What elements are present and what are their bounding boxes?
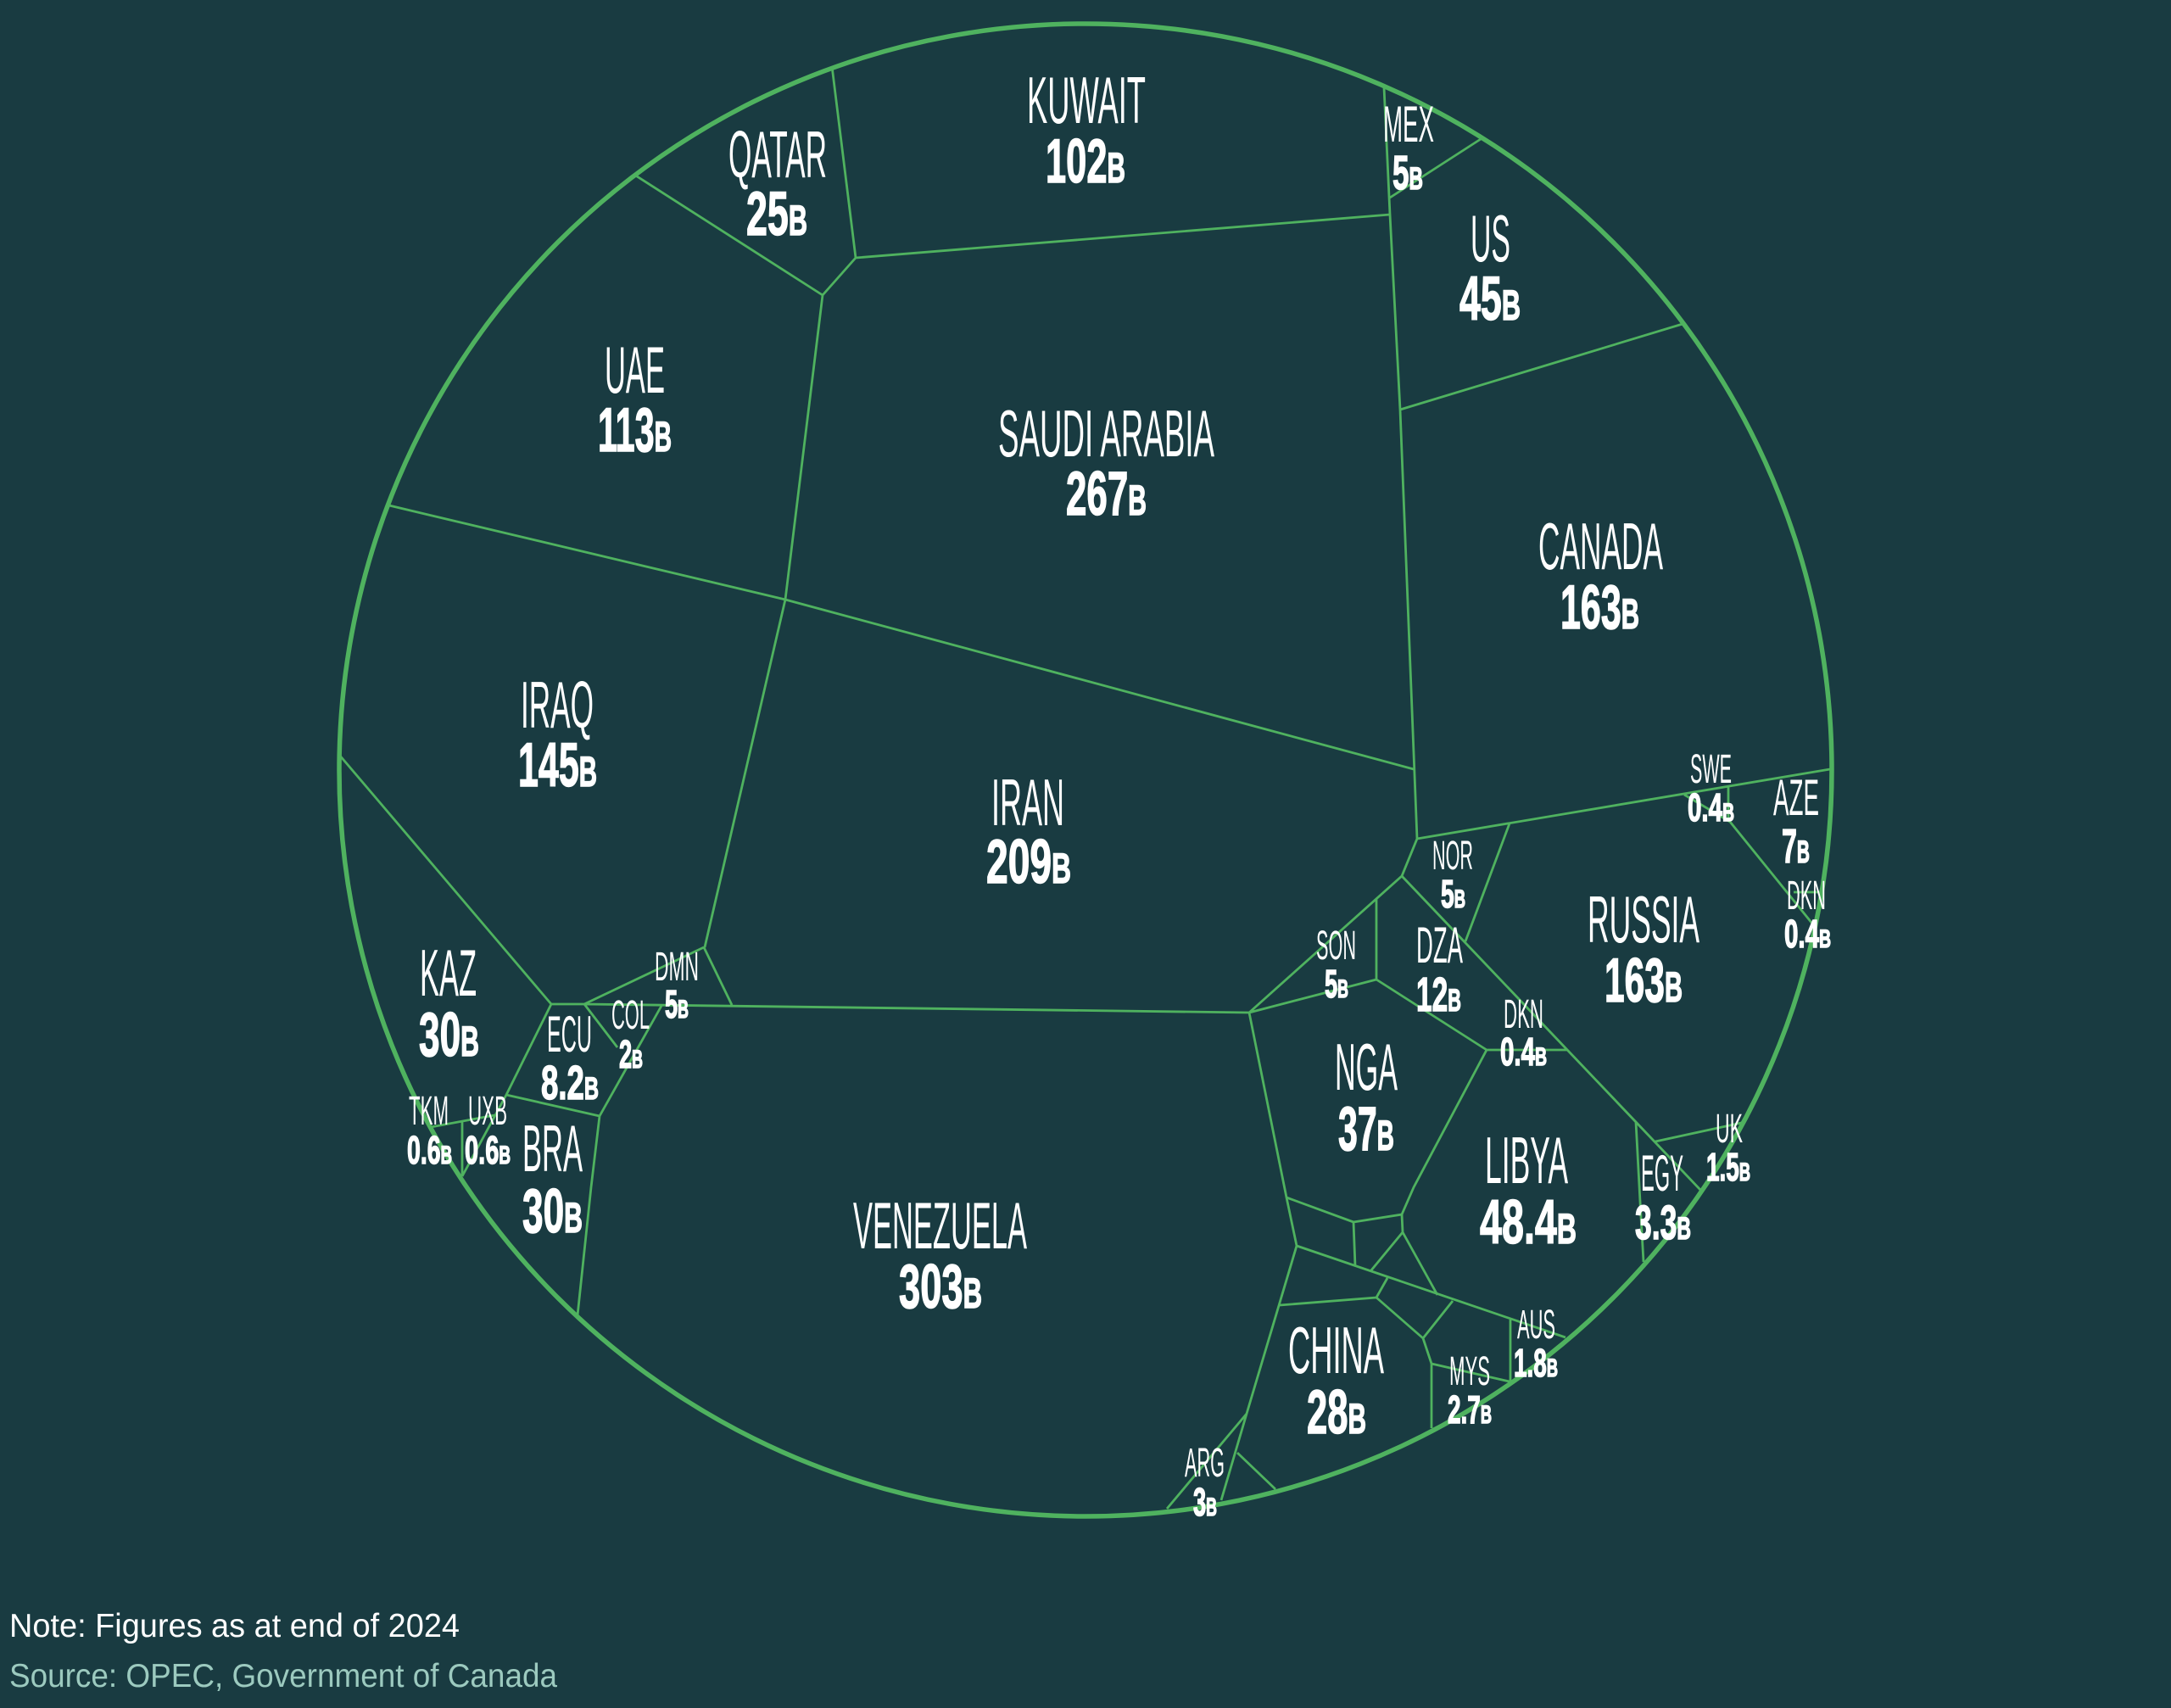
label: Uzbekistan: 0.6B: [465, 1128, 511, 1172]
label: Mexico: 5B: [1392, 146, 1423, 200]
chart: circular voronoi treemap: AZE: [1773, 769, 1819, 826]
label: Mexico: [1383, 96, 1434, 200]
label: UK: 1.5B: [1706, 1145, 1750, 1189]
label: UAE: 113B: [598, 396, 672, 465]
label: Malaysia: [1448, 1349, 1492, 1432]
label: Sudan: [1316, 924, 1356, 1006]
label: Algeria: 12B: [1416, 968, 1461, 1022]
note: Note: Figures as at end of 2024: [9, 1608, 460, 1644]
chart: circular voronoi treemap: NGA: [1335, 1030, 1398, 1104]
label: Libya: 48.4B: [1480, 1188, 1577, 1257]
chart: circular voronoi treemap: MEX: [1383, 96, 1434, 153]
chart: circular voronoi treemap: CHINA: [1288, 1313, 1384, 1387]
label: US: [1459, 201, 1521, 333]
chart: circular voronoi treemap: IRAQ: [521, 667, 594, 742]
label: Egypt: 3.3B: [1635, 1196, 1691, 1250]
chart: circular voronoi treemap: SON: [1316, 924, 1356, 968]
label: China: 28B: [1307, 1378, 1366, 1447]
chart: circular voronoi treemap: RUSSIA: [1588, 882, 1699, 957]
label: Egypt: [1635, 1145, 1691, 1250]
label: Norway: 5B: [1441, 872, 1465, 916]
label: UAE: [598, 332, 672, 465]
label: US: US: [1471, 201, 1510, 276]
chart: circular voronoi treemap: UAE: [605, 332, 665, 407]
label: Dominican Republic: 5B: [665, 982, 689, 1026]
chart: circular voronoi treemap: DMN: [655, 945, 699, 990]
label: Denmark centre: [1500, 992, 1547, 1074]
chart: circular voronoi treemap: AUS: [1517, 1303, 1555, 1348]
label: Turkmenistan: [407, 1089, 452, 1172]
label: Libya: [1480, 1123, 1577, 1257]
chart: circular voronoi treemap: DZA: [1416, 917, 1463, 974]
label: Norway: [1432, 834, 1473, 916]
chart: circular voronoi treemap: ARG: [1185, 1441, 1225, 1486]
chart: circular voronoi treemap: CANADA: [1538, 509, 1663, 583]
label: Venezuela: 303B: [899, 1253, 982, 1321]
label: Sweden: [1688, 747, 1734, 829]
label: Qatar: [728, 117, 827, 248]
label: Saudi Arabia: [998, 396, 1214, 528]
chart: circular voronoi treemap: VENEZUELA: [853, 1188, 1027, 1263]
label: Iraq: [518, 667, 597, 800]
label: Argentina: [1185, 1441, 1225, 1524]
label: Iran: IRAN: [991, 765, 1064, 840]
chart: circular voronoi treemap: SAUDI ARABIA: [998, 396, 1214, 471]
chart: circular voronoi treemap: MYS: [1449, 1349, 1490, 1394]
cell borders: [339, 66, 1830, 1509]
chart: circular voronoi treemap: EGY: [1641, 1145, 1683, 1202]
label: Dominican Republic: [655, 945, 699, 1026]
label: Argentina: 3B: [1193, 1480, 1217, 1524]
label: Qatar: 25B: [746, 180, 807, 248]
label: Saudi Arabia: 267B: [1066, 460, 1147, 528]
label: Colombia: 2B: [619, 1032, 643, 1076]
label: UK: UK: [1716, 1107, 1743, 1152]
label: Colombia: [611, 993, 650, 1076]
chart: circular voronoi treemap: KUWAIT: [1027, 63, 1146, 137]
label: China: [1288, 1313, 1384, 1447]
label: Libya: LIBYA: [1485, 1123, 1568, 1197]
outer circle: [339, 24, 1832, 1516]
chart: circular voronoi treemap: [339, 24, 1832, 1524]
label: Sudan: 5B: [1325, 962, 1348, 1006]
label: Kazakhstan: [419, 935, 479, 1069]
label: Canada: [1538, 509, 1663, 642]
label: Kazakhstan: 30B: [419, 1001, 479, 1069]
label: Nigeria: 37B: [1338, 1095, 1394, 1164]
chart: circular voronoi treemap: BRA: [522, 1111, 583, 1186]
chart: circular voronoi treemap: KAZ: [420, 935, 477, 1010]
label: Azerbaijan: [1773, 769, 1819, 874]
label: US: 45B: [1459, 265, 1521, 333]
label: Denmark right: DKN: [1787, 874, 1826, 918]
label: Turkmenistan: TKM: [409, 1089, 449, 1134]
label: Sweden: 0.4B: [1688, 785, 1734, 829]
label: Canada: 163B: [1560, 573, 1639, 642]
label: Kuwait: [1027, 63, 1146, 196]
label: Uzbekistan: UXB: [468, 1089, 507, 1134]
chart: circular voronoi treemap: COL: [611, 993, 650, 1038]
label: Kuwait: 102B: [1046, 127, 1125, 196]
label: Brazil: 30B: [522, 1177, 583, 1246]
chart: circular voronoi treemap: ECU: [547, 1006, 592, 1063]
label: Iran: 209B: [986, 828, 1071, 896]
label: Iran: [986, 765, 1071, 896]
label: Nigeria: [1335, 1030, 1398, 1164]
label: Malaysia: 2.7B: [1448, 1387, 1492, 1432]
label: UK: [1706, 1107, 1750, 1189]
label: Russia: 163B: [1605, 946, 1683, 1015]
label: Turkmenistan: 0.6B: [407, 1128, 452, 1172]
label: Ecuador: 8.2B: [541, 1056, 599, 1110]
label: Algeria: [1416, 917, 1463, 1022]
chart: circular voronoi treemap: NOR: [1432, 834, 1473, 879]
label: Azerbaijan: 7B: [1782, 819, 1810, 874]
source: Source: OPEC, Government of Canada: [9, 1658, 557, 1694]
label: Uzbekistan: [465, 1089, 511, 1172]
label: Iraq: 145B: [518, 731, 597, 800]
label: Australia: [1514, 1303, 1558, 1385]
label: Australia: 1.8B: [1514, 1341, 1558, 1385]
label: Ecuador: [541, 1006, 599, 1110]
label: Venezuela: [853, 1188, 1027, 1321]
label: Denmark centre: 0.4B: [1500, 1030, 1547, 1074]
label: Denmark right: [1784, 874, 1831, 956]
label: Denmark right: 0.4B: [1784, 912, 1831, 956]
label: Denmark centre: DKN: [1504, 992, 1543, 1037]
chart: circular voronoi treemap: QATAR: [728, 117, 827, 192]
chart: circular voronoi treemap: SWE: [1690, 747, 1732, 792]
label: Russia: [1588, 882, 1699, 1015]
label: Brazil: [522, 1111, 583, 1246]
